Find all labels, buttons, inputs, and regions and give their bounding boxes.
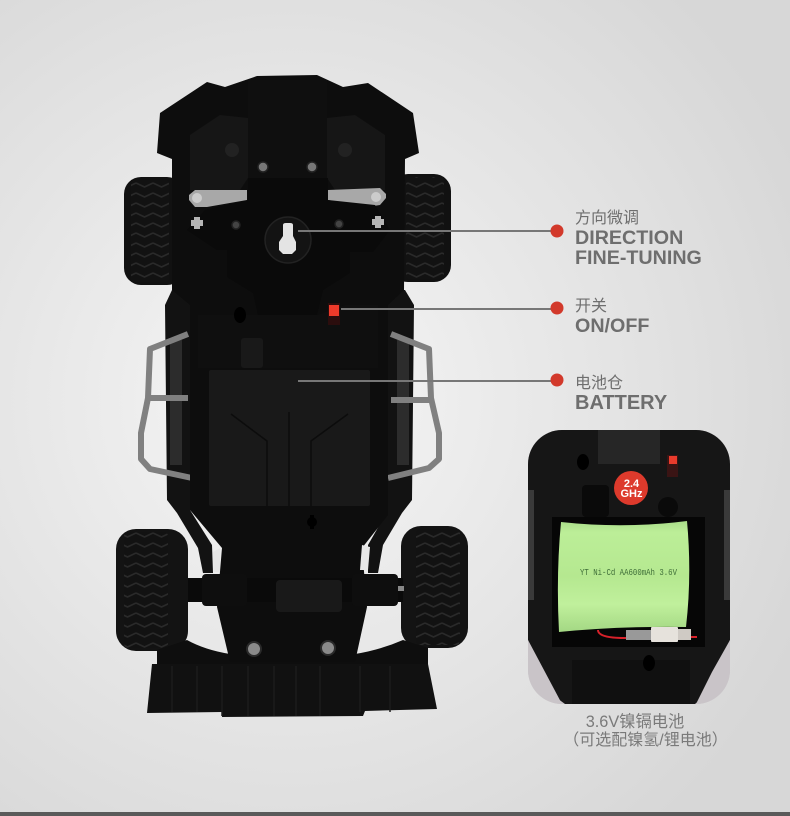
side roll bars: [141, 334, 439, 478]
2.4 GHz badge: 2.4: [624, 478, 640, 490]
inset caption: [563, 713, 728, 749]
red switch: [667, 455, 678, 477]
front cavities: [190, 115, 385, 190]
label: [575, 209, 702, 269]
fine-tuning knob: [265, 217, 311, 263]
battery bay: [552, 517, 705, 647]
label: ON/OFF: [575, 315, 649, 337]
keyholes: [577, 454, 655, 671]
2.4 GHz badge: [614, 471, 648, 505]
rear right wheel: [401, 526, 468, 648]
callout: on/off: [341, 297, 649, 337]
mid floor: [198, 305, 378, 368]
label: 开关: [575, 297, 607, 315]
plate cross holes: [191, 216, 384, 229]
bottom bar: [0, 812, 790, 816]
red dot: [550, 374, 564, 386]
label: FINE-TUNING: [575, 247, 702, 269]
body and side panels: [528, 430, 730, 704]
steering arms: [189, 188, 386, 207]
battery cover: [209, 370, 370, 529]
leader line: [298, 380, 557, 382]
leader line: [341, 308, 557, 310]
keyhole left: [234, 307, 246, 323]
inset caption: 3.6V镍镉电池: [586, 713, 684, 731]
label: [575, 297, 649, 337]
green battery pack: [558, 521, 689, 632]
car underside: [116, 75, 468, 717]
steering plate: [187, 178, 390, 315]
red dot: [550, 302, 564, 314]
label: 电池仓: [575, 374, 623, 392]
wire and connector: [598, 627, 697, 642]
main chassis: [157, 75, 419, 662]
clip slot: [241, 338, 263, 368]
rear left wheel: [116, 529, 188, 651]
screws: [232, 162, 343, 362]
light gaps beside rear body: [213, 545, 370, 572]
label: BATTERY: [575, 392, 668, 414]
rear axle: [188, 574, 404, 612]
2.4 GHz badge: GHz: [620, 488, 643, 500]
front right wheel: [391, 174, 451, 282]
callout: battery: [298, 374, 668, 414]
callout: direction fine-tuning: [298, 209, 702, 269]
center nose panel: [248, 80, 327, 178]
red dot: [550, 224, 564, 238]
clip and screw post: [582, 485, 678, 517]
front left wheel: [124, 177, 184, 285]
side sills: [165, 290, 414, 573]
rear wing: [147, 640, 437, 717]
rear bolts: [247, 641, 335, 656]
leader line: [298, 230, 557, 232]
inset caption: （可选配镍氢/锂电池）: [563, 731, 728, 749]
inset: battery compartment photo: [528, 430, 730, 704]
battery label: YT Ni-Cd AA600mAh 3.6V: [580, 568, 677, 578]
red power switch: [328, 303, 340, 325]
label: DIRECTION: [575, 227, 683, 249]
label: 方向微调: [575, 209, 639, 227]
label: [575, 374, 668, 414]
